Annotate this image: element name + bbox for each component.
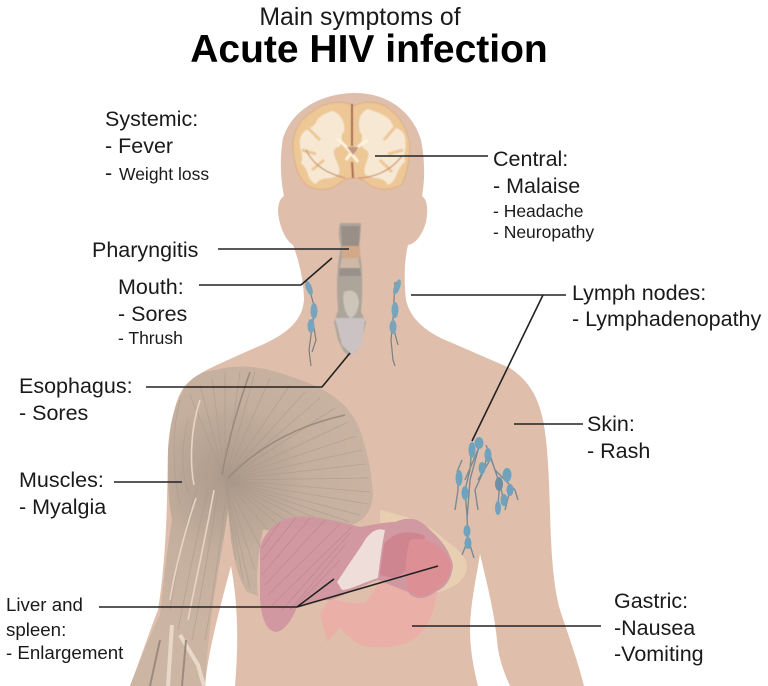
neck lymph nodes	[304, 278, 403, 366]
label: systemic: Systemic:	[105, 107, 198, 131]
label: systemic: - Fever	[105, 134, 173, 158]
label: skin: - Rash	[587, 439, 650, 463]
label: gastric: -Nausea	[614, 616, 695, 640]
label: mouth: Mouth:	[118, 275, 184, 299]
label: liver and spleen: Liver and	[6, 594, 83, 615]
larynx and esophagus	[334, 223, 366, 356]
label: skin: Skin:	[587, 412, 635, 436]
label: gastric: Gastric:	[614, 589, 688, 613]
label: muscles: - Myalgia	[19, 495, 106, 519]
label: skin	[587, 412, 650, 463]
label: mouth: - Sores	[118, 302, 187, 326]
label: systemic: -	[105, 161, 112, 185]
label: gastric	[614, 589, 704, 666]
liver and spleen	[260, 517, 453, 632]
label: systemic	[105, 107, 209, 185]
label: lymph nodes: Lymph nodes:	[572, 281, 706, 305]
body silhouette	[130, 93, 584, 686]
label: central: - Neuropathy	[493, 222, 594, 242]
label: muscles	[19, 468, 106, 519]
label: lymph nodes: - Lymphadenopathy	[572, 307, 761, 331]
stomach	[320, 580, 437, 647]
colon tissue	[380, 510, 467, 595]
label: esophagus	[19, 374, 133, 425]
axillary lymph nodes	[455, 437, 518, 558]
label: pharyngitis: Pharyngitis	[92, 238, 198, 262]
title: Acute HIV infection	[190, 28, 548, 71]
title	[190, 4, 548, 71]
label: gastric: -Vomiting	[614, 642, 704, 666]
label: muscles: Muscles:	[19, 468, 104, 492]
label: liver and spleen	[6, 594, 124, 663]
label: liver and spleen: - Enlargement	[6, 642, 124, 663]
label: systemic: Weight loss	[119, 164, 209, 184]
title: Main symptoms of	[259, 4, 461, 31]
brain	[293, 102, 410, 189]
label: mouth: - Thrush	[118, 328, 183, 348]
label: central	[493, 147, 594, 242]
label: central: - Headache	[493, 201, 583, 221]
label: central: Central:	[493, 147, 568, 171]
leader lines	[99, 156, 601, 626]
arm and shoulder muscles	[130, 366, 373, 686]
label: esophagus: - Sores	[19, 401, 88, 425]
label: central: - Malaise	[493, 174, 580, 198]
label: esophagus: Esophagus:	[19, 374, 133, 398]
muscle fibres	[170, 372, 370, 640]
label: liver and spleen: spleen:	[6, 619, 66, 640]
label: mouth	[118, 275, 187, 348]
label: lymph nodes	[572, 281, 761, 331]
